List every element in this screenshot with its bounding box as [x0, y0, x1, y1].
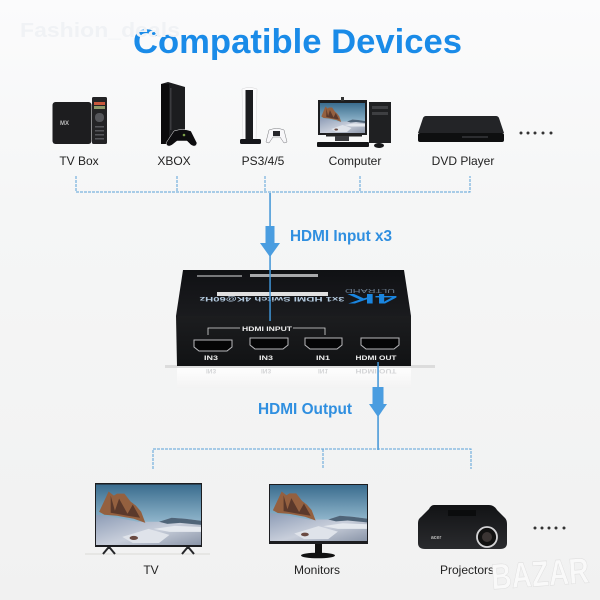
reflection: [177, 366, 411, 388]
switch front face: [176, 316, 411, 366]
device: TV Box: [52, 97, 107, 144]
device: PS3/4/5: [240, 88, 287, 144]
port labels: IN1: [316, 355, 331, 362]
label: TV Box: TV Box: [59, 154, 99, 168]
device: DVD Player: [418, 116, 504, 142]
mirrored labels: IN3: [261, 367, 271, 374]
top face printing: 3x1 HDMI Switch 4K@60Hz: [198, 295, 344, 302]
output connector lines: [153, 449, 471, 469]
port labels: IN3: [259, 355, 274, 362]
port labels: HDMI OUT: [356, 355, 397, 362]
mirrored labels: [206, 367, 397, 374]
shadow: [165, 365, 435, 368]
input connector lines: [76, 176, 470, 192]
device: Computer: [317, 97, 391, 148]
top face printing: 4K: [347, 291, 397, 307]
HDMI ports: [194, 338, 399, 351]
label: Projectors: Projectors: [440, 563, 494, 577]
label: PS3/4/5: PS3/4/5: [242, 154, 285, 168]
arrow: HDMI input: [260, 193, 280, 321]
port labels: [204, 355, 397, 362]
label: HDMI INPUT: HDMI INPUT: [242, 326, 292, 333]
mirrored labels: IN3: [206, 367, 216, 374]
arrow: HDMI output: [369, 362, 387, 450]
label: HDMI Input x3: HDMI Input x3: [290, 228, 392, 245]
device: XBOX: [161, 82, 197, 146]
device: Monitor: [269, 484, 368, 558]
mirrored labels: IN1: [318, 367, 328, 374]
top face printing: [197, 274, 397, 307]
switch top face: [176, 270, 411, 316]
device: HDMI switch: [165, 270, 435, 388]
device: TV: [85, 483, 210, 555]
label: XBOX: XBOX: [157, 154, 191, 168]
device: TV Box: MX: [60, 121, 69, 127]
top face printing: ULTRAHD: [344, 287, 395, 293]
bracket: HDMI INPUT: [208, 328, 325, 335]
watermark: Fashion_deals: Fashion_deals: [20, 20, 180, 42]
more devices dots: [520, 132, 552, 134]
mirrored labels: HDMI OUT: [356, 367, 397, 374]
device: Projector: [418, 505, 507, 549]
device: Projector: acer: [431, 535, 441, 541]
more outputs dots: [534, 526, 566, 530]
label: DVD Player: DVD Player: [432, 154, 494, 168]
label: Computer: Computer: [329, 154, 381, 168]
port labels: IN3: [204, 355, 219, 362]
title: Compatible Devices: [133, 23, 462, 61]
label: HDMI Output: HDMI Output: [258, 401, 353, 418]
label: Monitors: Monitors: [294, 563, 340, 577]
label: TV: TV: [143, 563, 159, 577]
